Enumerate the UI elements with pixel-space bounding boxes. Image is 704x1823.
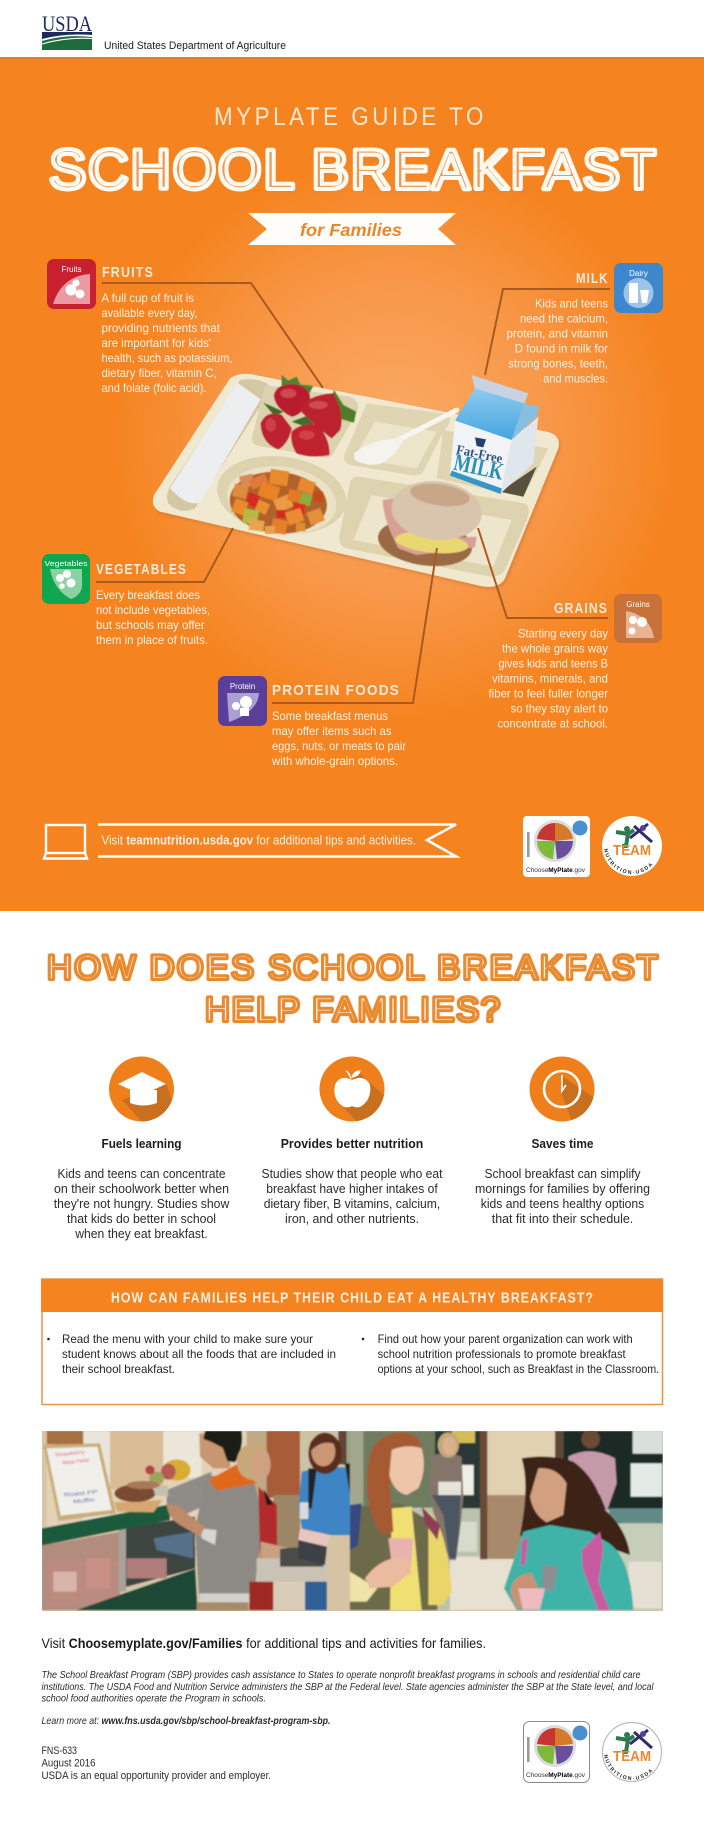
icon: clock: [530, 1056, 594, 1122]
column: saves time: [475, 1056, 650, 1226]
heading: vegetables: VEGETABLES: [96, 561, 187, 578]
icon: dairy: Dairy: [629, 269, 648, 278]
bowl compartment: [212, 448, 351, 542]
heading: how does school breakfast help families: HOW DOES SCHOOL BREAKFAST: [47, 949, 658, 987]
text: fruits: A full cup of fruit is: [102, 291, 194, 305]
text: publication details: [42, 1745, 271, 1782]
text: publication details: August 2016: [42, 1758, 96, 1770]
icon: apple: [320, 1056, 384, 1122]
logo: ChooseMyPlate: [523, 816, 590, 877]
icon: protein: Protein: [230, 682, 255, 691]
text: grains: Starting every day: [518, 626, 608, 640]
text: protein foods: with whole-grain options.: [271, 754, 398, 768]
ribbon: for Families: [248, 213, 456, 245]
callout: fruits: [47, 259, 232, 395]
menu board text: Strawberry: [55, 1450, 85, 1459]
text: milk: [506, 296, 608, 386]
tip: parent organization: school nutrition professionals to promote breakfast: [378, 1347, 626, 1361]
text: saves time: kids and teens healthy options: [481, 1197, 644, 1211]
illustration: lunch tray: [153, 374, 561, 589]
icon: grains: Grains: [626, 600, 650, 609]
text: program description: [42, 1669, 654, 1704]
heading: fruits: FRUITS: [102, 264, 154, 281]
text: fruits: health, such as potassium,: [102, 351, 232, 365]
icon: vegetables: [42, 554, 90, 604]
right half of photo: [350, 1430, 663, 1610]
logo: Team Nutrition footer: [602, 1722, 662, 1782]
left half of photo: Roast PP: [64, 1490, 98, 1499]
text: grains: the whole grains way: [502, 642, 608, 656]
text: fuels learning: when they eat breakfast.: [74, 1227, 208, 1241]
callout: vegetables: [42, 554, 210, 647]
text: fuels learning: they're not hungry. Studies show: [54, 1197, 230, 1211]
left half of photo: [42, 1431, 360, 1611]
tip: read the menu: their school breakfast.: [62, 1362, 175, 1376]
icon: vegetables: Vegetables: [44, 559, 88, 568]
column: fuels learning: [54, 1056, 230, 1241]
text: provides better nutrition: [262, 1167, 443, 1226]
heading: milk: MILK: [576, 270, 608, 287]
ribbon: website: [98, 824, 456, 856]
heading: how does school breakfast help families: HOW DOES SCHOOL BREAKFAST: [47, 949, 658, 987]
milk compartment: [437, 430, 548, 497]
panel header: HOW CAN FAMILIES HELP THEIR CHILD EAT A HEALTHY BREAKFAST?: [111, 1290, 594, 1306]
text: vegetables: [96, 588, 210, 647]
text: fruits: are important for kids': [102, 336, 211, 350]
title: MyPlate guide to: MYPLATE GUIDE TO: [214, 103, 487, 131]
logo: Team Nutrition footer: TEAM: [613, 1748, 651, 1765]
tip: read the menu: [47, 1332, 336, 1376]
text: protein foods: may offer items such as: [272, 724, 392, 738]
food: breakfast sandwich: [375, 477, 485, 572]
panel header: [41, 1279, 663, 1312]
text: milk: need the calcium,: [520, 312, 608, 326]
icon: napkin: [170, 383, 261, 503]
text: vegetables: not include vegetables,: [96, 603, 210, 617]
photo: students in school cafeteria: [42, 1430, 663, 1611]
callout: milk: [506, 263, 663, 386]
text: saves time: School breakfast can simplify: [484, 1167, 641, 1181]
text: fruits: dietary fiber, vitamin C,: [102, 366, 216, 380]
text: fruits: [102, 291, 232, 395]
text: grains: [488, 626, 608, 730]
carton label: Fat-Free: [455, 442, 504, 466]
logo: ChooseMyPlate: ChooseMyPlate.gov: [526, 867, 586, 874]
text: protein foods: eggs, nuts, or meats to pair: [272, 739, 406, 753]
tip: read the menu: Read the menu with your child to make sure your: [62, 1332, 313, 1346]
text: vegetables: them in place of fruits.: [96, 633, 208, 647]
logo: ChooseMyPlate footer: ChooseMyPlate.gov: [526, 1772, 586, 1779]
heading: how does school breakfast help families: HELP FAMILIES?: [205, 991, 500, 1029]
icon: protein: [218, 676, 267, 726]
logo: USDA: [42, 11, 92, 50]
text: vegetables: but schools may offer: [96, 618, 205, 632]
napkin compartment: [167, 379, 272, 511]
text: learn more: Learn more at: www.fns.usda.gov/sbp/school-breakfast-program-sbp.: [42, 1715, 331, 1727]
ribbon: for Families: for Families: [300, 220, 402, 240]
text: provides better nutrition: dietary fiber, B vitamins, calcium,: [264, 1197, 440, 1211]
food: vegetables: [227, 468, 329, 537]
title: School Breakfast: SCHOOL BREAKFAST: [49, 138, 656, 200]
text: provides better nutrition: breakfast have higher intakes of: [266, 1182, 438, 1196]
logo: Team Nutrition: TEAM: [613, 842, 651, 859]
text: protein foods: [271, 709, 406, 768]
text: protein foods: Some breakfast menus: [272, 709, 388, 723]
illustration: milk carton: [450, 375, 539, 494]
tip: parent organization: [362, 1332, 659, 1376]
logo: Team Nutrition footer: NUTRITION·USDA: [604, 1754, 653, 1780]
left half of photo: Mango Parfait: [62, 1458, 90, 1466]
column: provides better nutrition: [262, 1056, 443, 1226]
tip: parent organization: Find out how your parent organization can work with: [378, 1332, 633, 1346]
text: milk: Kids and teens: [535, 296, 608, 310]
panel: orange hero: [0, 57, 704, 911]
food: strawberries: [261, 375, 356, 456]
text: fuels learning: on their schoolwork better when: [54, 1182, 229, 1196]
text: milk: protein, and vitamin: [506, 326, 608, 340]
heading: how does school breakfast help families: [47, 949, 658, 1029]
heading: protein foods: PROTEIN FOODS: [272, 682, 400, 699]
logo: Team Nutrition: [602, 816, 662, 876]
icon: laptop: [44, 825, 87, 858]
logo: USDA: USDA: [42, 11, 92, 36]
text: program description: school food authorities operate the Program in schools.: [42, 1692, 266, 1704]
text: fruits: available every day,: [102, 306, 198, 320]
tray body: [153, 374, 559, 587]
logo: Team Nutrition: NUTRITION·USDA: [604, 848, 653, 874]
heading: how does school breakfast help families: HELP FAMILIES?: [205, 991, 500, 1029]
text: milk: and muscles.: [543, 372, 608, 386]
icon: grains: [614, 594, 662, 643]
heading: grains: GRAINS: [554, 600, 608, 617]
text: fuels learning: that kids do better in school: [67, 1212, 216, 1226]
icon: graduation cap: [109, 1056, 175, 1125]
spork compartment: [344, 403, 450, 475]
text: fuels learning: Kids and teens can concentrate: [58, 1167, 226, 1181]
callout: grains: [488, 594, 662, 730]
text: milk: strong bones, teeth,: [508, 356, 608, 370]
text: saves time: [475, 1167, 650, 1226]
text: fuels learning: [54, 1167, 230, 1241]
title: School Breakfast: SCHOOL BREAKFAST: [49, 138, 656, 200]
text: provides better nutrition: Studies show that people who eat: [262, 1167, 443, 1181]
icon: fruits: Fruits: [62, 265, 82, 274]
logo: ChooseMyPlate footer: [524, 1722, 590, 1782]
subheading: saves time: Saves time: [532, 1137, 594, 1151]
ribbon: website: Visit teamnutrition.usda.gov for additional tips and activities.: [102, 834, 416, 848]
main compartment: [339, 477, 529, 577]
visit line: Visit Choosemyplate.gov/Families for additional tips and activities for families.: [42, 1635, 486, 1651]
tip: read the menu: student knows about all the foods that are included in: [62, 1347, 336, 1361]
fruit compartment: [252, 385, 358, 457]
panel: how can families help: [41, 1279, 663, 1404]
text: milk: D found in milk for: [515, 342, 608, 356]
text: saves time: that fit into their schedule.: [492, 1212, 633, 1226]
callout: protein foods: [218, 676, 406, 768]
leader lines: [96, 283, 610, 703]
text: grains: vitamins, minerals, and: [492, 672, 608, 686]
illustration: milk carton: MILK: [451, 450, 506, 486]
icon: fruits: [47, 259, 96, 309]
tip: parent organization: options at your school, such as Breakfast in the Classroom.: [378, 1362, 659, 1376]
text: saves time: mornings for families by offering: [475, 1182, 650, 1196]
left half of photo: Muffin: [73, 1497, 95, 1505]
icon: spork: [354, 410, 457, 465]
text: publication details: USDA is an equal opportunity provider and employer.: [42, 1770, 271, 1782]
text: grains: concentrate at school.: [498, 716, 608, 730]
icon: dairy: [614, 263, 663, 313]
text: grains: fiber to feel fuller longer: [488, 686, 608, 700]
subheading: fuels learning: Fuels learning: [102, 1137, 182, 1151]
text: fruits: providing nutrients that: [102, 321, 221, 335]
subheading: provides better nutrition: Provides better nutrition: [281, 1137, 423, 1151]
text: publication details: FNS-633: [42, 1745, 77, 1757]
agency name: United States Department of Agriculture: [104, 40, 286, 52]
text: grains: so they stay alert to: [511, 702, 608, 716]
text: grains: gives kids and teens B: [498, 656, 608, 670]
text: vegetables: Every breakfast does: [96, 588, 200, 602]
text: provides better nutrition: iron, and other nutrients.: [285, 1212, 419, 1226]
text: fruits: and folate (folic acid).: [102, 381, 206, 395]
